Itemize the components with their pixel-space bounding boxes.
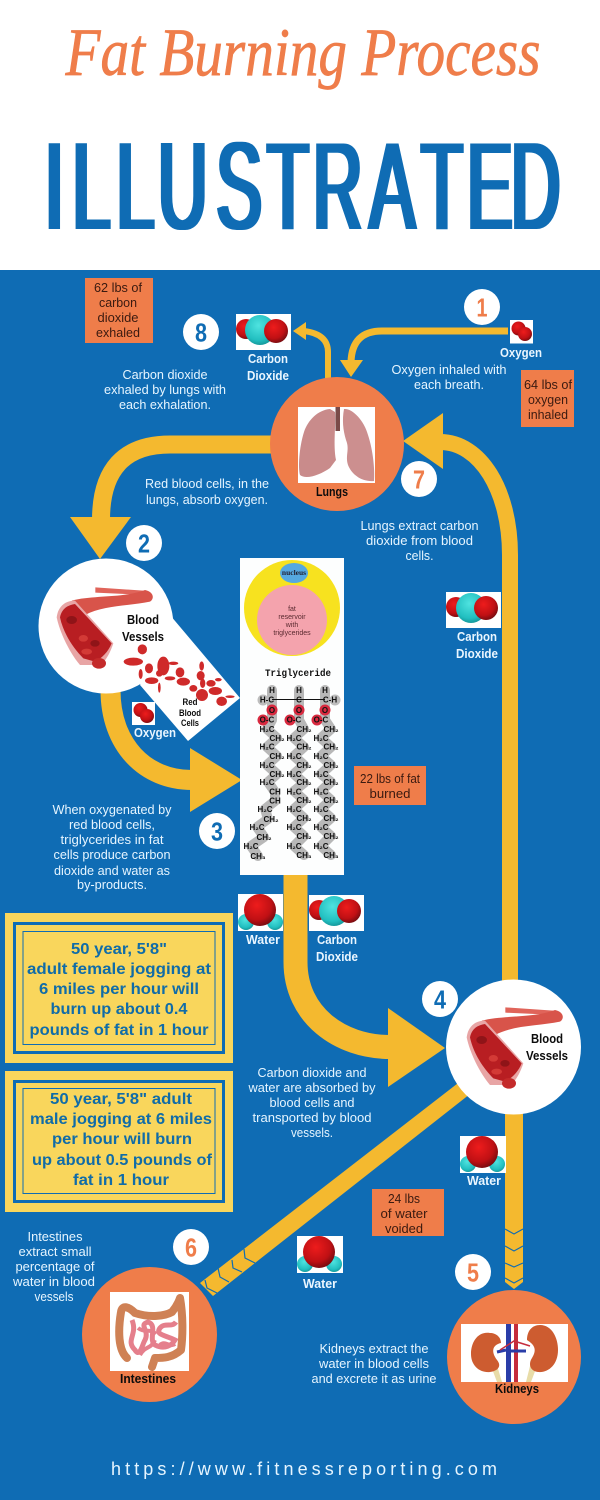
diagram: triglyceride chemical structure: H₂C — [286, 823, 302, 832]
diagram: triglyceride chemical structure: H₂C — [259, 778, 275, 787]
panel: male jogging fact: 50 year, 5'8" adult — [50, 1091, 193, 1108]
diagram: triglyceride chemical structure: H — [269, 686, 275, 695]
diagram: fat cell: reservoir — [278, 614, 306, 621]
diagram: triglyceride chemical structure: H₂C — [243, 842, 259, 851]
footer url: https://www.fitnessreporting.com — [111, 1459, 497, 1479]
step number 4 — [422, 981, 458, 1017]
callout: 64 lbs oxygen inhaled: 64 lbs of — [524, 377, 572, 392]
diagram: triglyceride chemical structure: CH₂ — [323, 761, 339, 770]
panel: female jogging fact: pounds of fat in 1 hour — [30, 1022, 208, 1039]
text: intestines extract water: water in blood — [12, 1274, 95, 1289]
diagram: triglyceride chemical structure: O — [269, 706, 275, 715]
step number 3 — [199, 813, 235, 849]
diagram: triglyceride chemical structure: CH — [269, 796, 281, 806]
text: carbon dioxide and water absorbed: vessels. — [291, 1125, 333, 1140]
step number 7: 7 — [413, 464, 425, 494]
label: red blood cells — [179, 697, 201, 728]
diagram: triglyceride chemical structure: CH₂ — [323, 742, 339, 752]
step number 8 — [183, 314, 219, 350]
label: blood vessels: Blood — [127, 612, 159, 627]
callout: 22 lbs of fat burned — [354, 766, 426, 805]
arrow: blood vessels to fat cell — [110, 690, 242, 812]
icon: water molecule — [460, 1136, 506, 1173]
text: oxygen inhaled: Oxygen inhaled with — [392, 362, 506, 377]
diagram: fat cell: with — [285, 622, 298, 629]
arrow: lungs to blood vessels — [70, 444, 275, 559]
diagram: triglyceride chemical structure: H₂C — [286, 734, 302, 743]
diagram: triglyceride chemical structure: H₂C — [249, 823, 265, 832]
diagram: triglyceride chemical structure: H-C — [260, 696, 274, 704]
text: lungs extract carbon dioxide: Lungs extract carbon — [360, 518, 478, 533]
step number 6: 6 — [185, 1232, 197, 1262]
label: carbon dioxide — [456, 629, 498, 661]
diagram: triglyceride chemical structure: C — [296, 696, 302, 704]
text: lungs extract carbon dioxide: cells. — [406, 548, 434, 563]
text: carbon dioxide and water absorbed: Carbon dioxide and — [258, 1065, 366, 1080]
step number 2 — [126, 525, 162, 561]
text: oxygen inhaled: each breath. — [414, 377, 484, 392]
heading: triglyceride: Triglyceride — [265, 668, 331, 680]
diagram: triglyceride chemical structure: O — [322, 706, 328, 715]
step number 4: 4 — [434, 984, 446, 1014]
callout: 24 lbs of water voided: voided — [385, 1221, 423, 1236]
text: red blood cells absorb oxygen: lungs, absorb oxygen. — [146, 492, 268, 507]
diagram: triglyceride chemical structure: H — [322, 686, 328, 695]
diagram: triglyceride chemical structure: H₂C — [313, 734, 329, 743]
diagram: triglyceride chemical structure: CH₂ — [296, 814, 312, 823]
panel: female jogging fact: 50 year, 5'8" — [71, 941, 167, 958]
panel: female jogging fact — [5, 913, 233, 1063]
text: intestines extract water: Intestines — [28, 1229, 83, 1244]
diagram: triglyceride chemical structure: H₂C — [259, 761, 275, 770]
diagram: triglyceride chemical structure: CH₃ — [296, 851, 312, 860]
text: carbon dioxide exhaled — [104, 367, 226, 412]
diagram: triglyceride chemical structure — [243, 686, 340, 861]
label: water: Water — [467, 1173, 501, 1188]
diagram: triglyceride chemical structure: H₂C — [257, 805, 273, 814]
diagram: triglyceride chemical structure: CH₂ — [263, 815, 279, 824]
organ: intestines: Intestines — [120, 1371, 176, 1386]
icon: scattered red blood cells — [124, 644, 235, 706]
step number 5 — [455, 1254, 491, 1290]
callout: 24 lbs of water voided: of water — [380, 1206, 428, 1221]
label: carbon dioxide — [316, 932, 358, 964]
callout: 64 lbs oxygen inhaled: oxygen — [528, 392, 568, 407]
label: carbon dioxide: Dioxide — [456, 646, 498, 661]
label: oxygen: Oxygen — [134, 725, 176, 740]
label: carbon dioxide: Carbon — [457, 629, 497, 644]
diagram: triglyceride chemical structure: CH₂ — [323, 814, 339, 823]
diagram: triglyceride chemical structure: CH₂ — [296, 832, 312, 841]
callout: 62 lbs carbon dioxide exhaled: 62 lbs of — [94, 280, 142, 295]
organ: blood vessels with red blood cells — [38, 558, 240, 741]
text: oxygen inhaled — [392, 362, 506, 392]
diagram: triglyceride chemical structure: H₂C — [313, 823, 329, 832]
callout: 64 lbs oxygen inhaled — [521, 370, 574, 427]
organ: blood vessels: Vessels — [526, 1048, 568, 1063]
diagram: triglyceride chemical structure: O — [296, 706, 302, 715]
organ: kidneys: Kidneys — [495, 1381, 539, 1396]
panel: fat cell and triglyceride diagram — [240, 558, 344, 875]
arrow: lungs to carbon dioxide — [293, 322, 328, 380]
label: red blood cells: Red — [182, 697, 198, 707]
organ: intestines — [82, 1267, 217, 1402]
diagram: triglyceride chemical structure: H₂C — [313, 805, 329, 814]
label: oxygen: Oxygen — [500, 345, 542, 360]
text: carbon dioxide exhaled: Carbon dioxide — [122, 367, 208, 382]
text: oxygenated triglycerides: When oxygenated by — [52, 802, 172, 817]
panel: male jogging fact — [5, 1071, 233, 1212]
diagram: triglyceride chemical structure: CH₂ — [269, 770, 285, 779]
step number 3: 3 — [211, 816, 223, 846]
callout: 62 lbs carbon dioxide exhaled: exhaled — [96, 325, 140, 340]
panel: male jogging fact: per hour will burn — [52, 1131, 192, 1148]
icon: oxygen molecule — [132, 702, 155, 725]
diagram: triglyceride chemical structure: CH₂ — [269, 734, 285, 743]
text: intestines extract water: percentage of — [16, 1259, 95, 1274]
diagram: triglyceride chemical structure: CH₂ — [269, 752, 285, 761]
panel: male jogging fact: up about 0.5 pounds of — [32, 1152, 213, 1169]
text: lungs extract carbon dioxide: dioxide from blood — [366, 533, 473, 548]
diagram: triglyceride chemical structure: C-H — [323, 696, 337, 704]
icon: blood vessel — [57, 587, 153, 669]
diagram: triglyceride chemical structure: H₂C — [259, 725, 275, 734]
text: intestines extract water — [12, 1229, 95, 1304]
callout: 22 lbs of fat burned: burned — [370, 786, 410, 801]
step number 1: 1 — [476, 292, 488, 322]
step number 1 — [464, 289, 500, 325]
diagram: triglyceride chemical structure: CH₂ — [323, 832, 339, 841]
step number 7 — [401, 461, 437, 497]
diagram: triglyceride chemical structure: CH₂ — [323, 796, 339, 805]
diagram: triglyceride chemical structure: H₂C — [259, 742, 275, 752]
organ: lungs — [270, 377, 404, 511]
diagram: triglyceride chemical structure: H₂C — [286, 842, 302, 851]
diagram: triglyceride chemical structure: H₂C — [313, 752, 329, 761]
organ: lungs: Lungs — [316, 484, 348, 499]
panel: male jogging fact: fat in 1 hour — [73, 1172, 169, 1189]
organ: kidneys — [447, 1290, 581, 1424]
text: kidneys extract water — [312, 1341, 436, 1386]
icon: oxygen molecule — [510, 320, 533, 344]
diagram: fat cell: triglycerides — [273, 630, 311, 637]
diagram: triglyceride chemical structure: CH₃ — [250, 852, 266, 861]
step number 6 — [173, 1229, 209, 1265]
diagram: triglyceride chemical structure: CH₂ — [296, 725, 312, 734]
text: lungs extract carbon dioxide — [360, 518, 478, 563]
label: carbon dioxide: Dioxide — [247, 368, 289, 383]
label: carbon dioxide: Carbon — [317, 932, 357, 947]
organ: blood vessels — [446, 980, 581, 1114]
diagram: triglyceride chemical structure: CH — [269, 788, 281, 796]
diagram: triglyceride chemical structure: H₂C — [313, 770, 329, 779]
diagram: triglyceride chemical structure: H₂C — [313, 842, 329, 851]
text: carbon dioxide and water absorbed — [248, 1065, 376, 1140]
text: red blood cells absorb oxygen — [145, 476, 269, 507]
icon: carbon dioxide molecule — [309, 895, 364, 931]
text: oxygenated triglycerides: cells produce carbon — [54, 847, 170, 862]
text: carbon dioxide exhaled: each exhalation. — [119, 397, 211, 412]
diagram: triglyceride chemical structure: O-C — [260, 716, 275, 724]
text: kidneys extract water: and excrete it as urine — [312, 1371, 436, 1386]
arrow: oxygen to lungs — [340, 331, 508, 377]
diagram: triglyceride chemical structure: H₂C — [313, 788, 329, 796]
label: blood vessels — [122, 612, 164, 644]
text: oxygenated triglycerides: dioxide and water as — [54, 863, 170, 878]
panel: female jogging fact: adult female jogging at — [27, 961, 212, 978]
callout: 24 lbs of water voided: 24 lbs — [388, 1191, 420, 1206]
panel: male jogging fact: male jogging at 6 miles — [30, 1111, 212, 1128]
step number 2: 2 — [138, 528, 150, 558]
label: water: Water — [303, 1276, 337, 1291]
diagram: triglyceride chemical structure: H₂C — [286, 788, 302, 796]
text: carbon dioxide and water absorbed: water are absorbed by — [248, 1080, 376, 1095]
callout: 62 lbs carbon dioxide exhaled: dioxide — [98, 310, 138, 325]
diagram: fat cell: fat — [288, 606, 296, 613]
diagram: triglyceride chemical structure: O-C — [314, 716, 329, 724]
text: oxygenated triglycerides: triglycerides in fat — [60, 832, 164, 847]
label: carbon dioxide — [247, 351, 289, 383]
label: red blood cells: Cells — [181, 718, 199, 728]
text: oxygenated triglycerides — [52, 802, 172, 892]
icon: water molecule — [238, 894, 283, 931]
label: red blood cells: Blood — [179, 708, 201, 718]
label: water: Water — [246, 932, 280, 947]
text: oxygenated triglycerides: by-products. — [77, 877, 147, 892]
arrow: fat cell to blood vessels — [296, 870, 445, 1087]
arrow: blood vessels to lungs (right side) — [403, 413, 510, 985]
diagram: triglyceride chemical structure: CH₂ — [296, 796, 312, 805]
diagram: triglyceride chemical structure: CH₂ — [323, 725, 339, 734]
callout: 62 lbs carbon dioxide exhaled: carbon — [99, 295, 137, 310]
label: carbon dioxide: Dioxide — [316, 949, 358, 964]
icon: carbon dioxide molecule — [446, 592, 501, 628]
label: carbon dioxide: Carbon — [248, 351, 288, 366]
icon: carbon dioxide molecule — [236, 314, 291, 350]
icon: water molecule — [297, 1236, 343, 1273]
label: blood vessels: Vessels — [122, 629, 164, 644]
text: oxygenated triglycerides: red blood cells, — [69, 817, 155, 832]
text: red blood cells absorb oxygen: Red blood cells, in the — [145, 476, 269, 491]
diagram: fat cell — [244, 560, 340, 656]
arrow: blood vessels to kidneys with chevrons — [505, 1112, 523, 1289]
text: kidneys extract water: water in blood cells — [318, 1356, 429, 1371]
diagram: triglyceride chemical structure: H₂C — [286, 752, 302, 761]
title: ILLUSTRATED: ILLUSTRATED — [45, 117, 560, 256]
callout: 64 lbs oxygen inhaled: inhaled — [528, 407, 568, 422]
diagram: triglyceride chemical structure: CH₂ — [256, 833, 272, 842]
step number 5: 5 — [467, 1258, 479, 1288]
diagram: triglyceride chemical structure: CH₂ — [323, 778, 339, 787]
panel: female jogging fact: 6 miles per hour will — [39, 981, 199, 998]
step number 8: 8 — [195, 318, 207, 348]
panel: female jogging fact: burn up about 0.4 — [50, 1001, 188, 1018]
diagram: triglyceride chemical structure: CH₂ — [296, 742, 312, 752]
organ: blood vessels: Blood — [531, 1031, 563, 1046]
text: intestines extract water: extract small — [18, 1244, 92, 1259]
callout: 22 lbs of fat burned: 22 lbs of fat — [360, 771, 420, 786]
diagram: triglyceride chemical structure: H — [296, 686, 302, 695]
diagram: triglyceride chemical structure: H₂C — [286, 770, 302, 779]
diagram: triglyceride chemical structure: CH₂ — [296, 761, 312, 770]
text: carbon dioxide exhaled: exhaled by lungs with — [104, 382, 226, 397]
diagram: triglyceride chemical structure: O-C — [287, 716, 302, 724]
diagram: triglyceride chemical structure: CH₂ — [296, 778, 312, 787]
diagram: triglyceride chemical structure: H₂C — [286, 805, 302, 814]
diagram: fat cell: nucleus — [282, 568, 306, 577]
arrow: blood vessels to intestines with chevrons — [200, 1080, 470, 1296]
text: kidneys extract water: Kidneys extract the — [320, 1341, 428, 1356]
text: intestines extract water: vessels — [34, 1289, 74, 1304]
text: carbon dioxide and water absorbed: blood cells and — [270, 1095, 354, 1110]
callout: 62 lbs carbon dioxide exhaled — [85, 278, 153, 343]
text: carbon dioxide and water absorbed: transported by blood — [252, 1110, 372, 1125]
callout: 24 lbs of water voided — [372, 1189, 444, 1236]
diagram: triglyceride chemical structure: CH₃ — [323, 851, 339, 860]
